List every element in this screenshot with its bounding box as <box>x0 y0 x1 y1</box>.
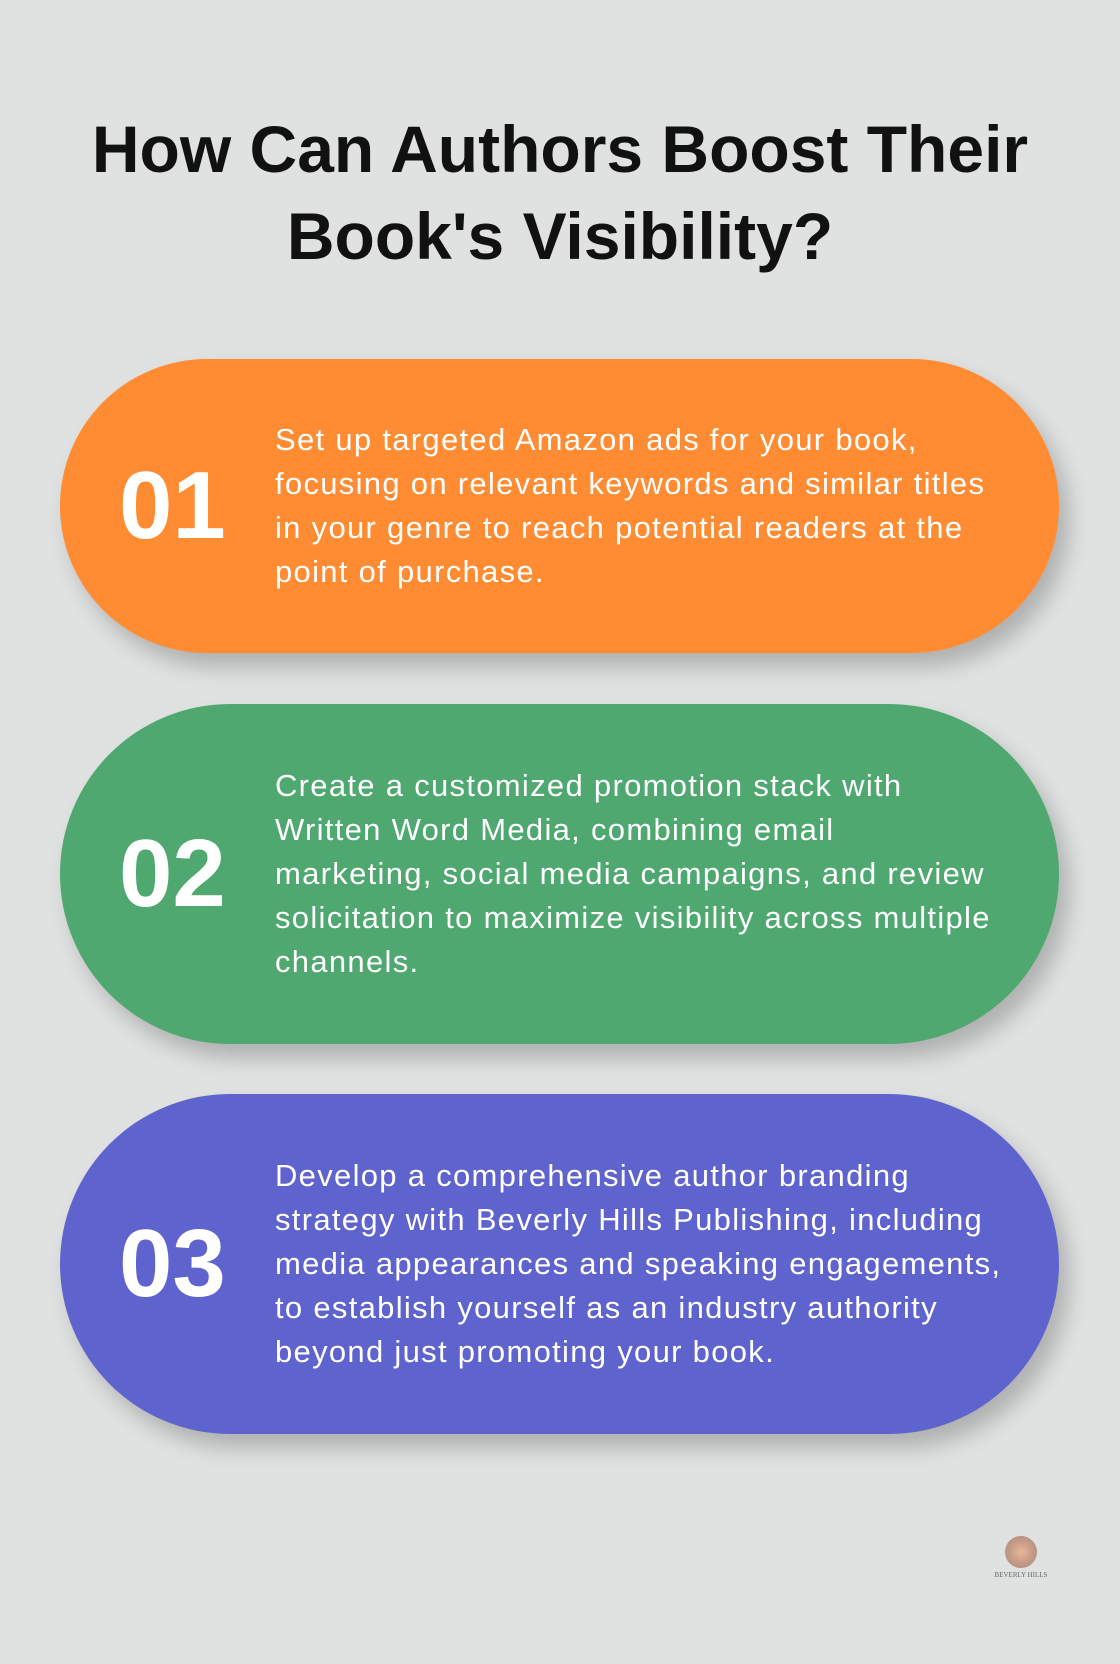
text 01: focusing on relevant keywords and similar titles <box>275 466 985 501</box>
title <box>92 112 1028 273</box>
text 03: Develop a comprehensive author branding <box>275 1158 910 1193</box>
number 03: 03 <box>119 1210 226 1317</box>
title: Book's Visibility? <box>287 199 833 273</box>
text 02: Written Word Media, combining email <box>275 812 834 847</box>
text 03: to establish yourself as an industry authority <box>275 1290 938 1325</box>
text 02: solicitation to maximize visibility across multiple <box>275 900 991 935</box>
text 01: Set up targeted Amazon ads for your book, <box>275 422 918 457</box>
panel: step 01 <box>60 359 1059 653</box>
number 01: 01 <box>119 452 226 559</box>
text 01: in your genre to reach potential readers at the <box>275 510 963 545</box>
logo: BEVERLY HILLS <box>995 1571 1047 1579</box>
text 03: beyond just promoting your book. <box>275 1334 775 1369</box>
text 02: Create a customized promotion stack with <box>275 768 902 803</box>
text 03: media appearances and speaking engagements, <box>275 1246 1001 1281</box>
text 02: marketing, social media campaigns, and review <box>275 856 985 891</box>
panel: step 03 <box>60 1094 1059 1434</box>
text 01: point of purchase. <box>275 554 545 589</box>
title: How Can Authors Boost Their <box>92 112 1028 186</box>
logo <box>994 1536 1047 1579</box>
text 02 <box>275 768 991 979</box>
text 03: strategy with Beverly Hills Publishing, including <box>275 1202 983 1237</box>
text 01 <box>275 422 985 589</box>
text 02: channels. <box>275 944 419 979</box>
number 02: 02 <box>119 820 226 927</box>
panel: step 02 <box>60 704 1059 1044</box>
text 03 <box>275 1158 1001 1369</box>
